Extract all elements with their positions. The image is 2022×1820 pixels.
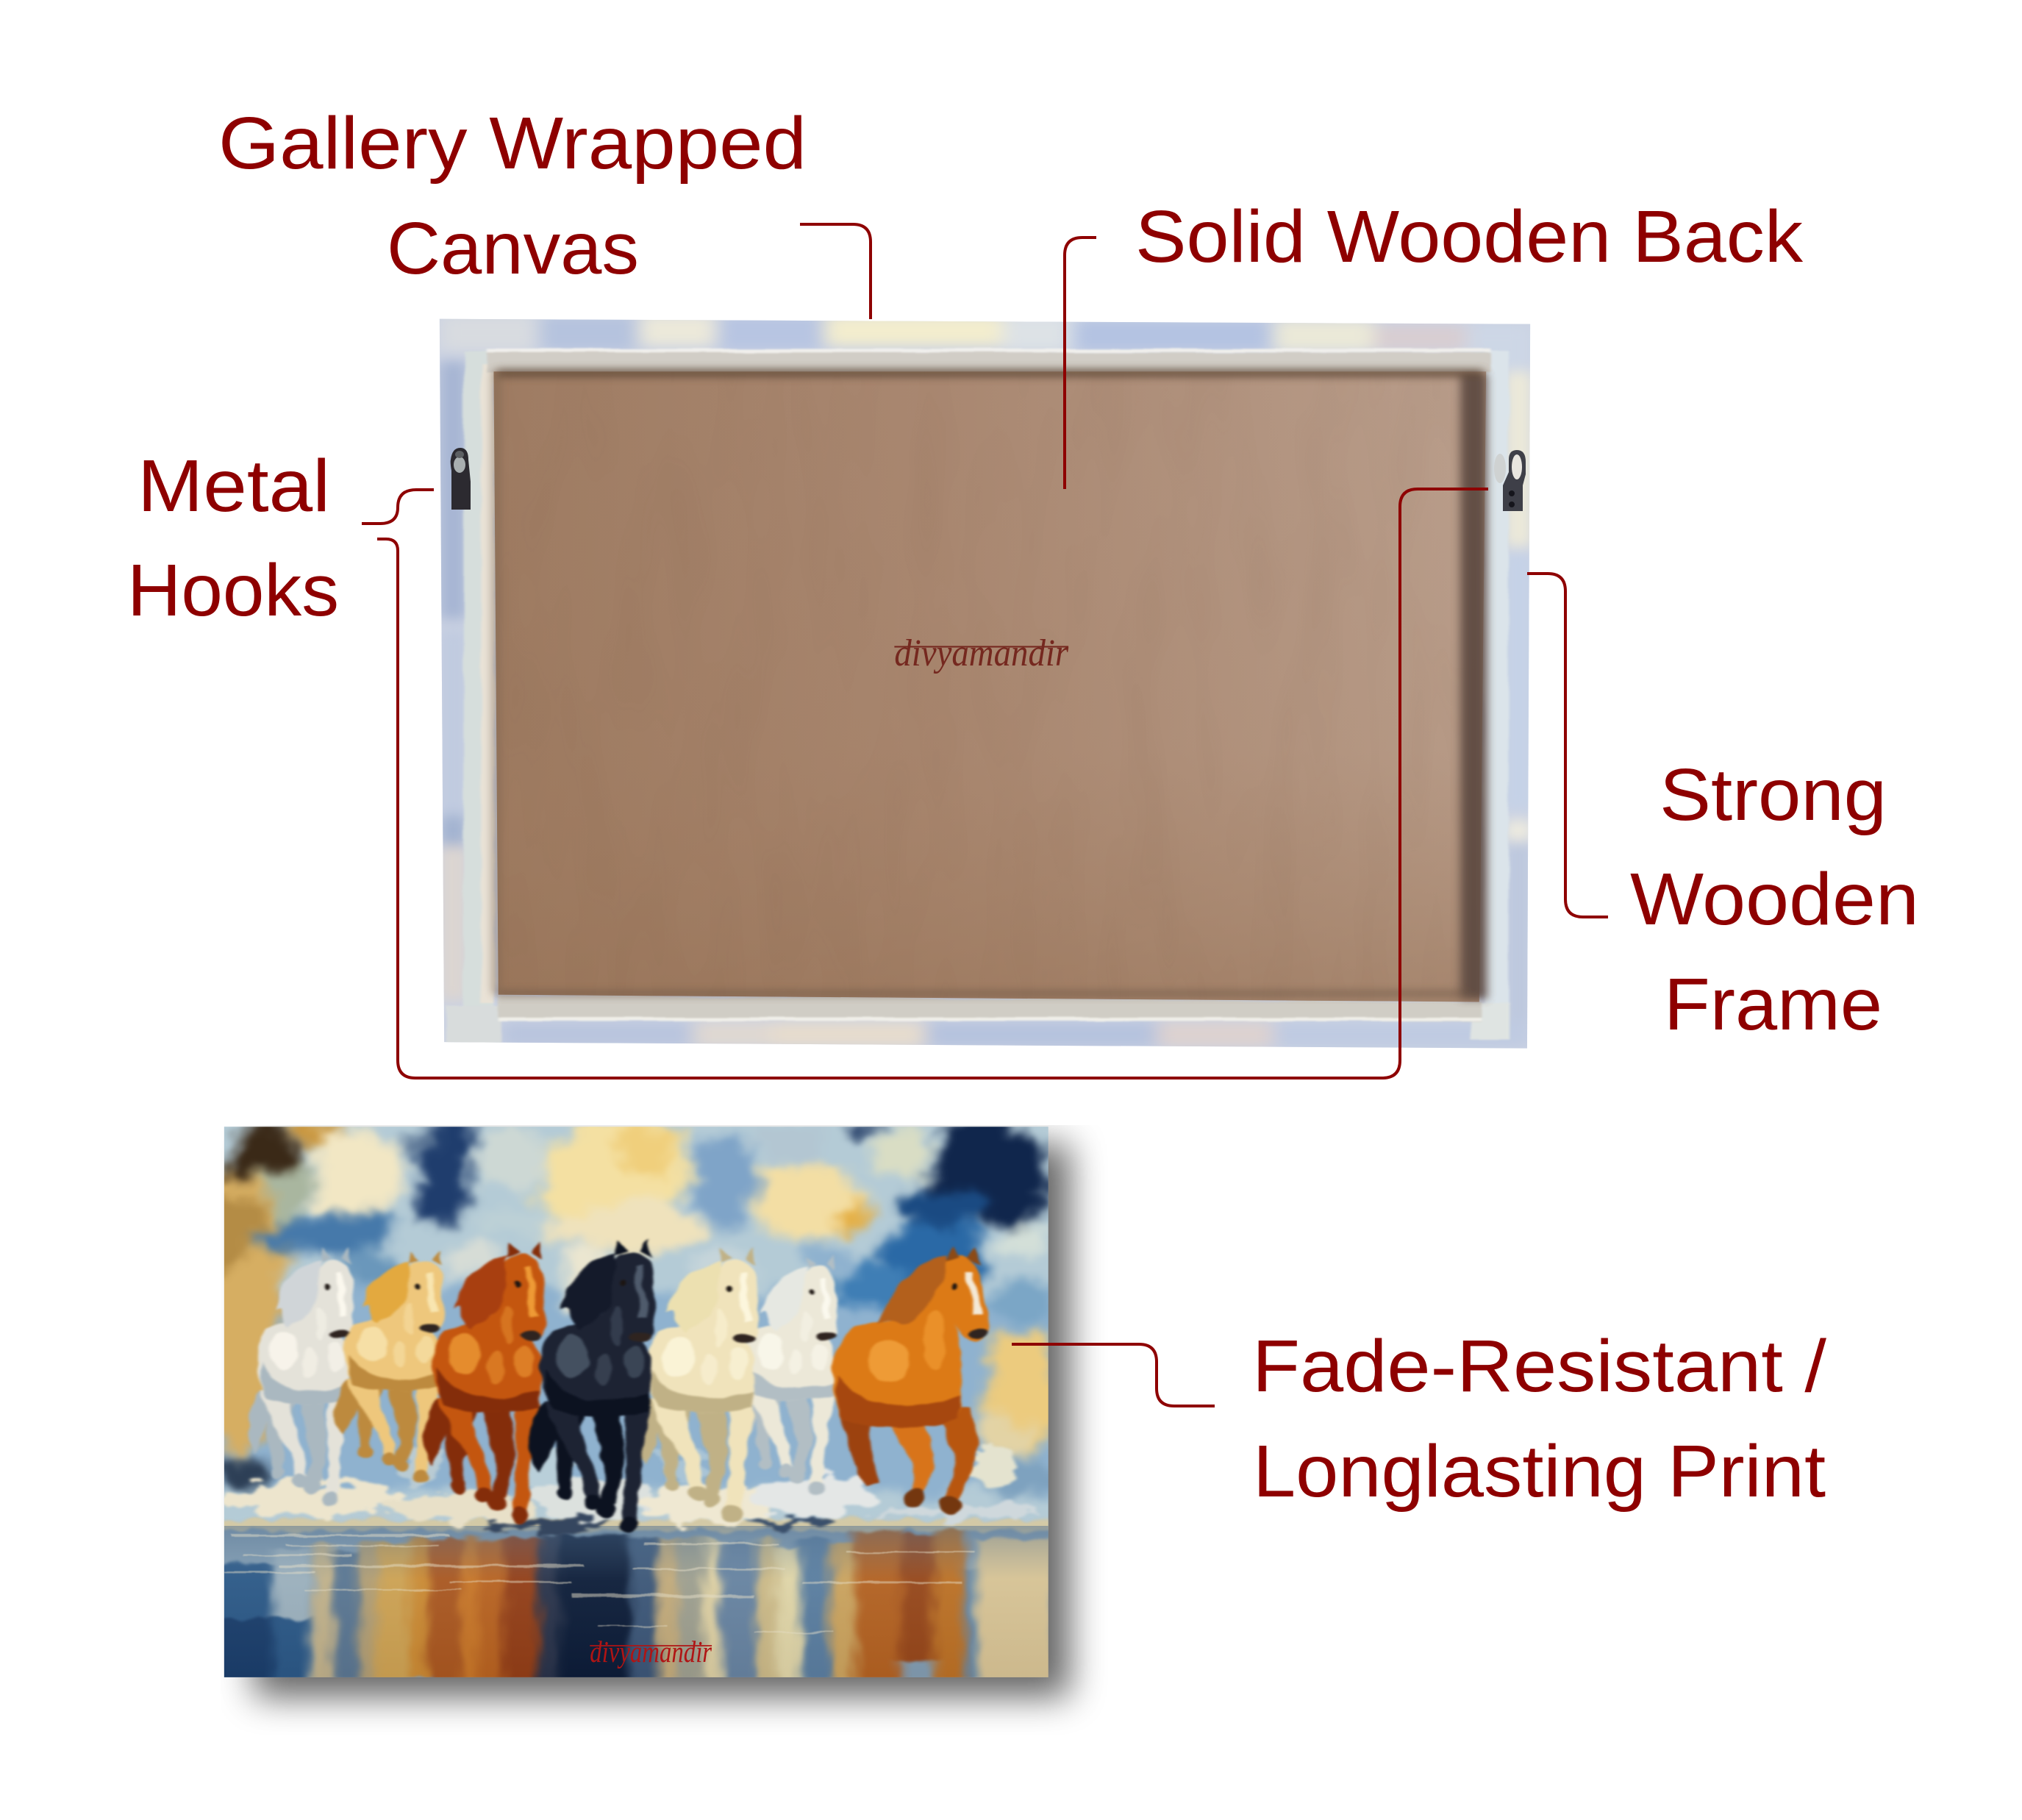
icon: left metal hook [451, 448, 471, 510]
label: Gallery Wrapped Canvas: Gallery Wrapped [218, 102, 807, 185]
horse 2: golden [335, 1251, 443, 1483]
water ripples [224, 1534, 974, 1632]
label: Strong Wooden Frame: Wooden [1630, 858, 1919, 941]
connector: Metal Hooks to right hook [377, 489, 1488, 1078]
horse 3: chestnut [424, 1241, 546, 1524]
label: Strong Wooden Frame: Strong [1660, 754, 1887, 836]
label: Solid Wooden Back: Solid Wooden Back [1135, 196, 1804, 278]
icon: right metal hook [1494, 450, 1526, 511]
panel: seven horses canvas painting [224, 1127, 1048, 1677]
label: Fade-Resistant / Longlasting Print: Longlasting Print [1253, 1430, 1826, 1513]
connector: Gallery Wrapped Canvas [800, 224, 871, 319]
label: Metal Hooks [127, 445, 339, 632]
label: Strong Wooden Frame [1630, 754, 1919, 1046]
connector: Strong Wooden Frame [1527, 574, 1608, 917]
horse 6: white [737, 1255, 837, 1496]
label: Fade-Resistant / Longlasting Print [1252, 1325, 1826, 1513]
horse 1: white [249, 1246, 353, 1507]
horse 5: cream [637, 1246, 759, 1521]
label: Gallery Wrapped Canvas: Canvas [387, 207, 639, 290]
connector: Fade-Resistant print [1012, 1344, 1215, 1406]
brown hardboard backing [493, 371, 1486, 1002]
connector: Metal Hooks to left hook [362, 490, 434, 524]
infographic canvas [133, 115, 1915, 1724]
horse 4: black [530, 1238, 656, 1533]
brand mark on painting: divyamandir [590, 1635, 712, 1669]
label: Strong Wooden Frame: Frame [1664, 963, 1882, 1046]
label: Metal Hooks: Hooks [127, 549, 339, 632]
label: Fade-Resistant / Longlasting Print: Fade-Resistant / [1252, 1325, 1826, 1407]
panel: painting drop shadow [254, 1144, 1070, 1697]
sky brush clouds [224, 1127, 1048, 1528]
horses [249, 1238, 989, 1533]
brand mark on backing: divyamandir [894, 632, 1068, 674]
water reflections [224, 1515, 1048, 1677]
connector: Solid Wooden Back [1065, 238, 1096, 489]
label: Gallery Wrapped Canvas [218, 102, 807, 290]
horse 7: orange galloping [832, 1246, 989, 1515]
panel: back of the framed canvas [440, 315, 1532, 1049]
splash of white water [224, 1446, 1041, 1530]
label: Metal Hooks: Metal [137, 445, 330, 527]
